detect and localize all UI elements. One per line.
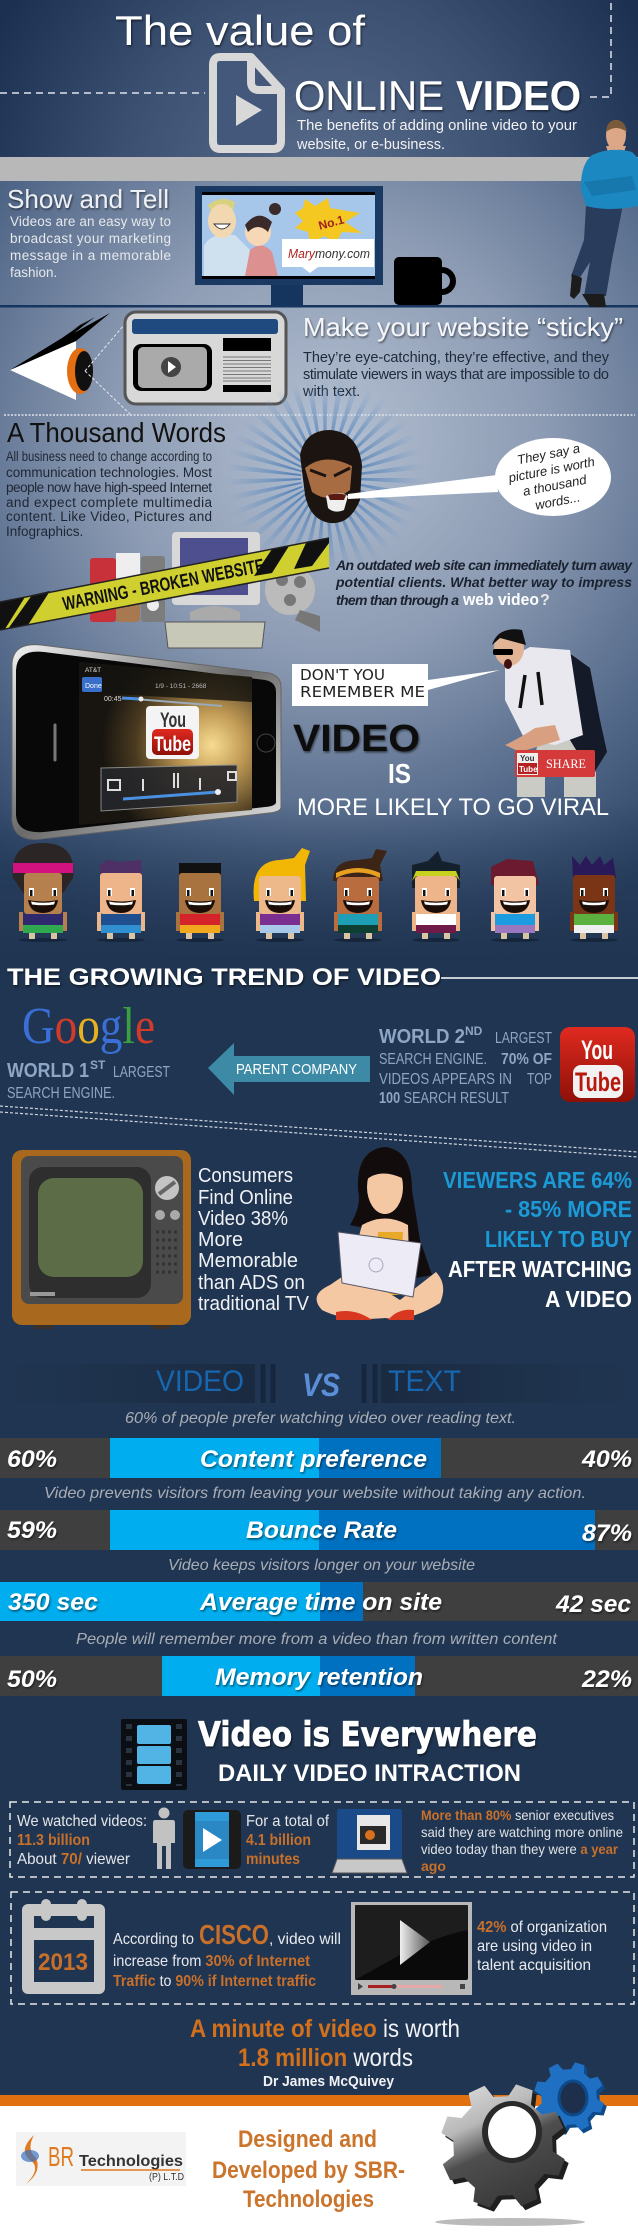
illustration: phone with youtube	[12, 645, 281, 839]
heading: the growing trend of video: THE GROWING TREND OF VIDEO	[7, 964, 441, 991]
speech bubble: a thousand	[522, 472, 588, 499]
text: consumers: Consumers	[198, 1165, 293, 1187]
illustration: phone with youtube: You	[160, 709, 186, 732]
illustration: shouting man head	[300, 430, 362, 523]
text: we watched videos: About 70/ viewer	[17, 1851, 131, 1868]
text: senior executives: said they are watching more online	[421, 1824, 623, 1840]
figure: man in blue sweater	[570, 120, 638, 307]
quote	[190, 2015, 460, 2090]
bar: average time on site	[0, 1582, 638, 1621]
bar: memory retention	[0, 1656, 638, 1696]
text: viewers	[443, 1167, 632, 1312]
text: cisco: Traffic to 90% if Internet traffic	[113, 1973, 316, 1990]
warning tape: WARNING - BROKEN WEBSITE	[61, 556, 266, 615]
box: forecasts	[11, 1892, 634, 2004]
heading: daily video intraction: DAILY VIDEO INTRACTION	[218, 1760, 521, 1787]
text: world 2nd: LARGEST	[495, 1030, 552, 1047]
character 7	[491, 859, 539, 942]
text: consumers: Find Online	[198, 1187, 293, 1209]
icon: monitor with couple	[195, 186, 383, 306]
bar: content preference	[0, 1438, 638, 1478]
icon: calendar	[22, 1899, 105, 1994]
text: cisco: increase from 30% of Internet	[113, 1953, 311, 1970]
orange band	[0, 2095, 638, 2106]
shelf line	[0, 305, 638, 308]
speech bubble: They say a	[516, 441, 581, 467]
text: we watched videos	[17, 1813, 147, 1868]
text: cisco: CISCO	[199, 1919, 269, 1950]
callout: outdated web site: web video	[462, 590, 539, 609]
icon: monitor with couple: No.1	[317, 212, 346, 233]
text: consumers: Memorable	[198, 1250, 298, 1272]
body text: They’re eye-catching, they’re effective, and they	[303, 350, 610, 366]
illustration: broken computer	[90, 532, 320, 648]
text: we watched videos: 11.3 billion	[17, 1832, 90, 1849]
speech bubble: picture is worth	[506, 454, 596, 486]
warning tape	[0, 538, 329, 630]
heading: video is everywhere: Video is Everywhere	[198, 1715, 537, 1755]
icon: film strip	[121, 1719, 187, 1790]
logo: sbr technologies	[16, 2132, 186, 2186]
icon: youtube	[560, 1027, 635, 1102]
text: designed and developed: Technologies	[243, 2186, 374, 2213]
grey band	[0, 157, 638, 181]
body text: stimulate viewers in ways that are impossible to do	[303, 367, 609, 383]
icon: video player	[351, 1902, 472, 1995]
panel: header	[0, 0, 611, 153]
speech box: don't you remember me: REMEMBER ME	[300, 683, 425, 701]
icon: eye	[10, 313, 131, 415]
text: world 2nd: VIDEOS APPEARS IN	[379, 1071, 512, 1088]
icon: retro tv	[12, 1150, 191, 1329]
icon: calendar: 2013	[38, 1949, 88, 1976]
body text: fashion.	[10, 265, 57, 280]
text: world 1st: WORLD 1	[7, 1060, 89, 1082]
panel: video vs text	[0, 1364, 638, 1696]
text: world 2nd	[379, 1024, 552, 1107]
text: designed and developed: Designed and	[238, 2126, 377, 2153]
caption: Video keeps visitors longer on your website	[168, 1557, 475, 1574]
body text: content. Like Video, Pictures and	[6, 509, 212, 524]
text: world 1st: LARGEST	[113, 1064, 170, 1081]
heading: video: VIDEO	[293, 718, 420, 760]
character 4	[254, 848, 310, 942]
character 2	[97, 860, 145, 942]
icon: person	[153, 1808, 175, 1869]
text: world 2nd: SEARCH ENGINE.	[379, 1051, 487, 1068]
bar: content preference: 40%	[581, 1446, 632, 1473]
icon: gears	[423, 2053, 616, 2230]
callout: outdated web site: An outdated web site can immediately turn away	[335, 557, 633, 573]
text: world 2nd: WORLD 2	[379, 1026, 465, 1048]
illustration: phone with youtube: AT&T	[85, 667, 101, 674]
quote: 1.8 million words	[238, 2044, 413, 2072]
bar: memory retention: 22%	[581, 1666, 632, 1693]
panel: row of characters	[13, 843, 618, 942]
text: consumers: traditional TV	[198, 1293, 310, 1315]
illustration: girl with laptop	[317, 1147, 443, 1320]
body text: with text.	[302, 384, 360, 400]
text: consumers: than ADS on	[198, 1272, 305, 1294]
icon: monitor with couple: Marymony.com	[288, 247, 370, 261]
icon: youtube: You	[581, 1035, 613, 1065]
heading: video vs text	[0, 1364, 638, 1403]
text: cisco: According to	[113, 1931, 194, 1948]
text: world 2nd: 70% OF	[501, 1051, 552, 1068]
text: senior executives	[421, 1807, 623, 1874]
callout: outdated web site: them than through a	[336, 592, 459, 608]
text: senior executives: video today than they were a year	[421, 1841, 619, 1857]
body text: Videos are an easy way to	[10, 214, 171, 229]
text: for a total of: For a total of	[246, 1813, 330, 1830]
illustration: phone with youtube: 1/9 - 10:51 - 2668	[155, 683, 207, 690]
text: consumers: More	[198, 1229, 243, 1251]
bar: memory retention: Memory retention	[215, 1664, 423, 1691]
text: for a total of	[246, 1813, 330, 1868]
icon: mug	[394, 257, 453, 305]
panel: growing trend	[0, 964, 638, 1329]
body text: broadcast your marketing	[10, 231, 171, 246]
text: viewers: - 85% MORE	[505, 1196, 632, 1222]
panel: show and tell	[0, 120, 638, 308]
character 6	[412, 851, 460, 942]
icon: film play	[183, 1810, 241, 1869]
bar: average time on site: Average time on site	[199, 1589, 442, 1616]
button: youtube share	[515, 750, 595, 777]
bar: content preference: 60%	[7, 1446, 57, 1473]
character 1	[13, 843, 73, 942]
box: daily stats	[10, 1802, 634, 1877]
title: the value of: The value of	[115, 7, 365, 54]
quote: A minute of video is worth	[190, 2015, 460, 2043]
heading: a thousand words: A Thousand Words	[7, 417, 226, 448]
panel: viral video	[12, 629, 609, 839]
character 8	[570, 856, 618, 942]
icon: youtube: Tube	[575, 1067, 621, 1097]
character 5	[333, 849, 387, 942]
bar: bounce rate: Bounce Rate	[246, 1517, 397, 1544]
bar: bounce rate: 59%	[7, 1517, 57, 1544]
logo: sbr technologies: Technologies	[79, 2153, 183, 2170]
bar: bounce rate	[0, 1510, 638, 1550]
speech box: don't you remember me: DON'T YOU	[300, 666, 385, 684]
title: online video: VIDEO	[456, 72, 581, 119]
callout: outdated web site: potential clients. What better way to impress	[335, 574, 632, 590]
body text: communication technologies. Most	[6, 465, 212, 480]
body text: and expect complete multimedia	[6, 495, 212, 510]
caption: Video prevents visitors from leaving your website without taking any action.	[44, 1485, 586, 1502]
button: youtube share: SHARE	[546, 756, 586, 771]
text: 42 percent	[477, 1919, 607, 1974]
bar: content preference: Content preference	[200, 1446, 427, 1473]
text: cisco	[113, 1919, 341, 1990]
caption: 60% of people prefer watching video over reading text.	[125, 1410, 516, 1427]
subtitle: website, or e-business.	[296, 136, 445, 153]
caption: People will remember more from a video than from written content	[76, 1631, 558, 1648]
speech box: don't you remember me	[292, 664, 500, 706]
heading: more likely to go viral: MORE LIKELY TO GO VIRAL	[297, 794, 609, 821]
heading: video vs text: VS	[302, 1367, 341, 1403]
text: for a total of: 4.1 billion	[246, 1832, 311, 1849]
heading: video vs text: VIDEO	[156, 1365, 244, 1398]
arrow: parent company	[208, 1043, 370, 1095]
text: world 2nd: 100 SEARCH RESULT	[379, 1090, 509, 1107]
illustration: phone with youtube: Tube	[154, 733, 191, 756]
bar: bounce rate: 87%	[582, 1520, 632, 1547]
text: consumers: Video 38%	[198, 1208, 288, 1230]
heading: show and tell: Show and Tell	[7, 184, 169, 214]
arrow: parent company: PARENT COMPANY	[236, 1061, 357, 1078]
text: 42 percent: are using video in	[477, 1938, 592, 1955]
text: for a total of: minutes	[246, 1851, 300, 1868]
button: youtube share: You	[520, 754, 535, 763]
text: world 1st: ST	[90, 1058, 106, 1072]
text: world 2nd: ND	[465, 1024, 483, 1038]
text: we watched videos: We watched videos:	[17, 1813, 147, 1830]
character 3	[176, 863, 224, 942]
subtitle: The benefits of adding online video to your	[297, 117, 577, 134]
quote: Dr James McQuivey	[263, 2073, 395, 2090]
text: 42 percent: 42% of organization	[477, 1919, 607, 1936]
icon: video file	[213, 57, 281, 149]
speech bubble: words...	[534, 489, 581, 513]
text: world 2nd: TOP	[527, 1071, 552, 1088]
text: designed and developed: Developed by SBR-	[212, 2157, 405, 2184]
panel: footer	[0, 2053, 638, 2230]
text: cisco: , video will	[269, 1931, 341, 1948]
title: online video: ONLINE	[294, 72, 444, 119]
icon: web page with video	[125, 312, 286, 404]
callout: outdated web site: ?	[540, 592, 550, 609]
text: designed and developed	[212, 2126, 405, 2213]
illustration: phone with youtube: Done	[85, 683, 102, 690]
icon: laptop	[332, 1809, 407, 1873]
body text: message in a memorable	[10, 248, 171, 263]
logo: sbr technologies: BR	[48, 2141, 74, 2172]
text: senior executives: ago	[421, 1858, 446, 1874]
body text: All business need to change according to	[6, 449, 212, 464]
text: viewers: A VIDEO	[545, 1286, 632, 1312]
panel: make your website sticky	[10, 312, 623, 415]
text: world 1st	[7, 1058, 170, 1102]
button: youtube share: Tube	[519, 765, 538, 774]
heading: video vs text: TEXT	[388, 1365, 461, 1398]
sun rays	[263, 416, 387, 540]
logo: google: Google	[22, 998, 155, 1055]
text: world 1st: SEARCH ENGINE.	[7, 1085, 115, 1102]
logo: sbr technologies: (P) L.T.D	[149, 2172, 184, 2183]
panel: video is everywhere	[10, 1715, 634, 2090]
bar: average time on site: 42 sec	[555, 1591, 631, 1618]
bar: average time on site: 350 sec	[8, 1589, 98, 1616]
text: senior executives: More than 80% senior executives	[421, 1807, 614, 1823]
heading: is: IS	[388, 758, 411, 789]
figure: dancing man	[492, 629, 607, 797]
dotted divider	[4, 414, 635, 416]
bar: memory retention: 50%	[7, 1666, 57, 1693]
heading: make your website sticky: Make your website “sticky”	[303, 312, 623, 342]
text: 42 percent: talent acquisition	[477, 1957, 591, 1974]
body text: Infographics.	[6, 524, 83, 539]
body text: people now have high-speed Internet	[6, 480, 212, 495]
illustration: phone with youtube: 00:45	[104, 696, 122, 703]
speech bubble	[348, 438, 611, 517]
panel: a thousand words	[0, 416, 633, 648]
